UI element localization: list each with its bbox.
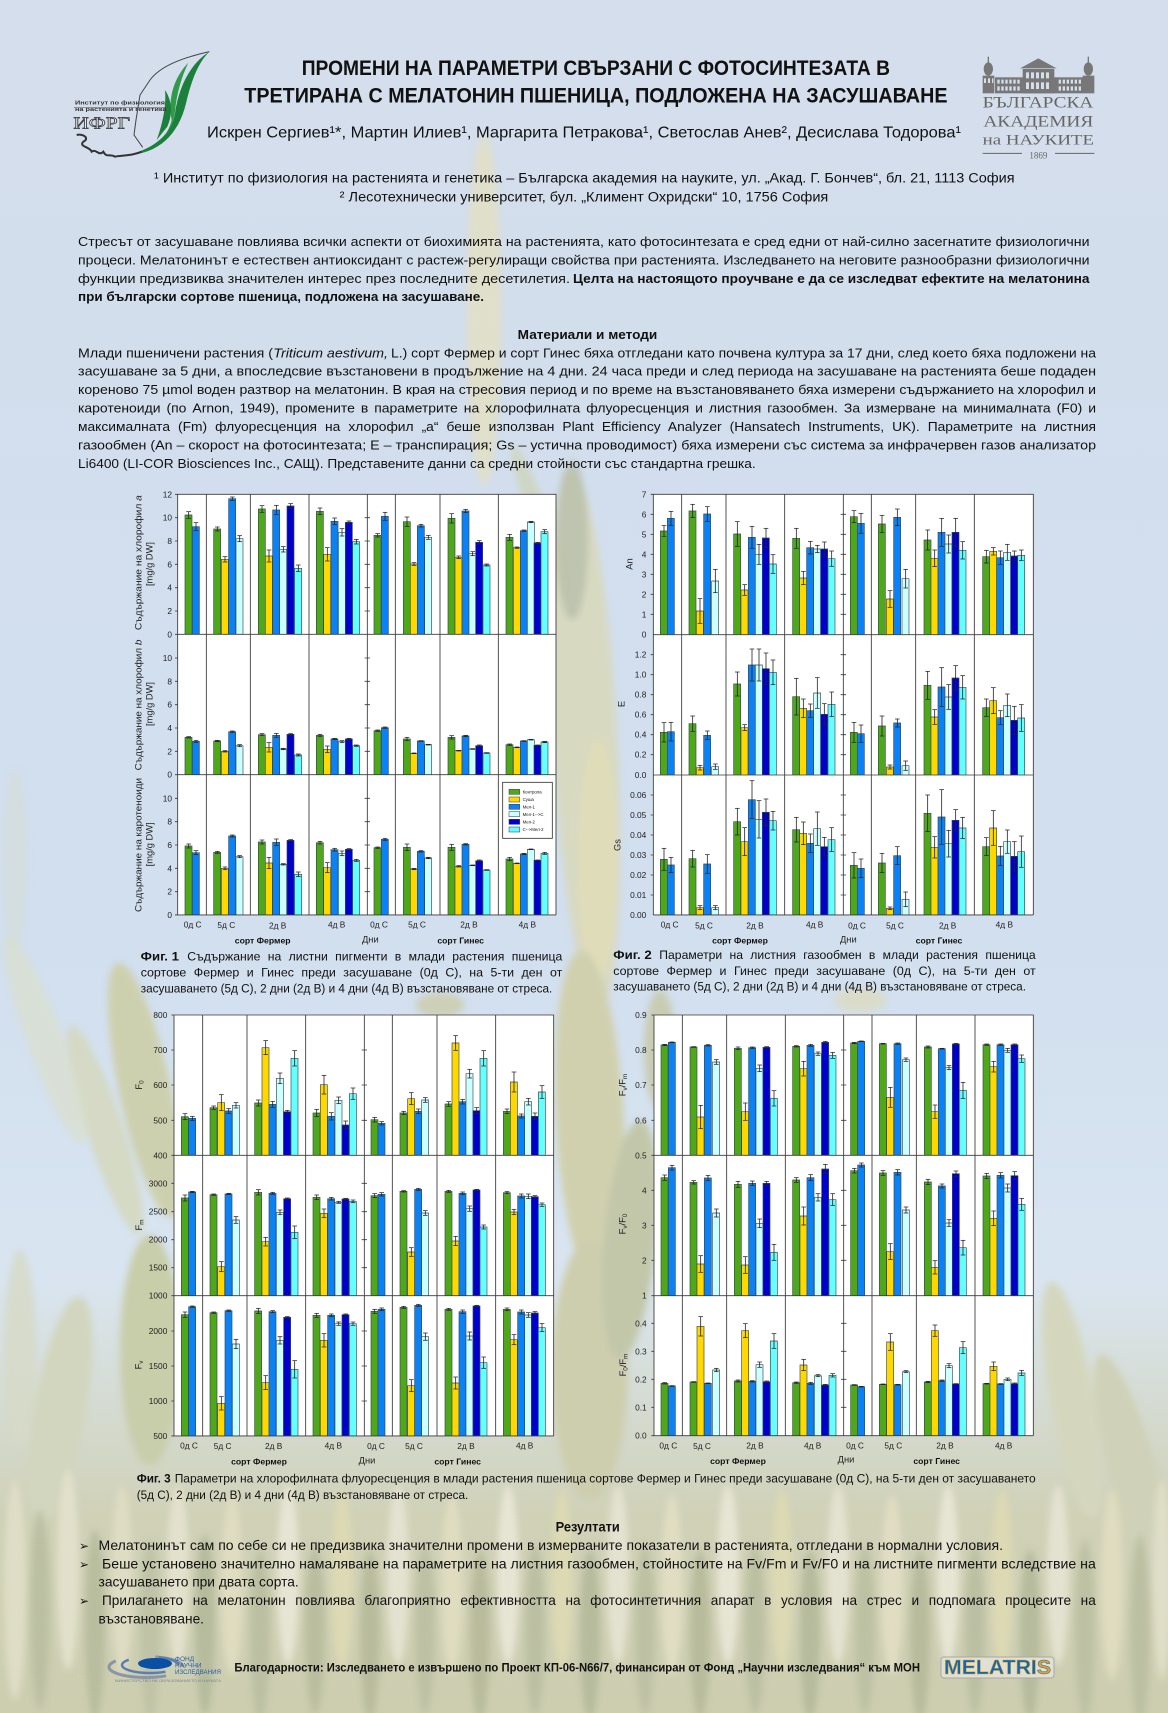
panel: F0/Fm bbox=[661, 1317, 1025, 1436]
academy name: БЪЛГАРСКА bbox=[983, 95, 1093, 112]
y-axis tick labels: 0.0 bbox=[635, 770, 647, 780]
y-axis tick labels: 1 bbox=[642, 1291, 647, 1301]
y-axis tick labels: 2000 bbox=[149, 1235, 168, 1245]
logo text: institute name: Институт по физиология bbox=[75, 99, 165, 106]
x-axis labels: сорт Фермер bbox=[710, 1456, 766, 1466]
y-axis tick labels: 7 bbox=[642, 489, 647, 499]
x-axis labels: сорт Фермер bbox=[235, 935, 291, 945]
y-axis tick labels: 10 bbox=[163, 513, 172, 523]
y-axis tick labels: 4 bbox=[167, 863, 172, 873]
y-axis titles: F bbox=[617, 1091, 627, 1096]
x-axis labels: Дни bbox=[840, 935, 857, 945]
logo: Bulgarian Academy of Sciences bbox=[983, 57, 1094, 160]
y-axis tick labels: 0.5 bbox=[635, 1150, 647, 1160]
x-axis labels: 0д С bbox=[367, 1441, 385, 1451]
caption: figure 1: сортове Фермер и Гинес преди засушаване (0д С), на 5-ти ден от bbox=[141, 966, 563, 980]
x-axis labels: сорт Гинес bbox=[434, 1456, 481, 1466]
x-axis labels: 2д В bbox=[936, 1440, 954, 1450]
x-axis labels: 5д С bbox=[214, 1441, 232, 1451]
caption: figure 1: Фиг. 1 bbox=[141, 950, 179, 964]
y-axis titles: [mg/g DW] bbox=[144, 822, 154, 866]
x-axis labels bbox=[659, 1440, 1013, 1466]
result 3: възстановяване. bbox=[98, 1610, 204, 1626]
y-axis titles: m bbox=[623, 1354, 630, 1359]
logo: national science fund: НАУЧНИ bbox=[175, 1662, 202, 1670]
methods text: Li6400 (LI-COR Biosciences Inc., САЩ). Представените данни са средни стойности със стандартна грешка. bbox=[78, 456, 756, 471]
y-axis titles bbox=[613, 558, 635, 851]
x-axis labels: 5д С bbox=[405, 1441, 423, 1451]
y-axis titles: /F bbox=[617, 1217, 627, 1225]
icon: academy building bbox=[983, 57, 1094, 93]
y-axis tick labels: 0.6 bbox=[635, 1115, 647, 1125]
result 3: ➢ bbox=[79, 1594, 89, 1608]
logo: national science fund: ИЗСЛЕДВАНИЯ bbox=[175, 1669, 221, 1676]
y-axis tick labels: 0 bbox=[167, 770, 172, 780]
y-axis tick labels: 0.4 bbox=[635, 730, 647, 740]
y-axis tick labels: 0.06 bbox=[630, 790, 647, 800]
x-axis labels: сорт Гинес bbox=[913, 1456, 960, 1466]
y-axis tick labels: 6 bbox=[167, 559, 172, 569]
academy name: на НАУКИТЕ bbox=[983, 132, 1094, 148]
y-axis tick labels: 0.8 bbox=[635, 1045, 647, 1055]
y-axis titles: 0 bbox=[139, 1080, 146, 1084]
x-axis labels: 4д В bbox=[996, 920, 1013, 930]
result 2: ➢ bbox=[79, 1557, 89, 1571]
heading: materials and methods: Материали и методи bbox=[518, 327, 657, 342]
y-axis tick labels: 8 bbox=[167, 817, 172, 827]
methods text: газообмен (An – скорост на фотосинтезата; E – транспирация; Gs – устична проводимост) бяха измерени със система за инфрачервен газов анализатор bbox=[78, 437, 1096, 452]
y-axis titles: /F bbox=[617, 1079, 627, 1087]
x-axis labels bbox=[184, 919, 536, 945]
y-axis tick labels: 0.01 bbox=[630, 890, 647, 900]
x-axis labels: 2д В bbox=[746, 920, 764, 930]
figure 3b chart: Fv/Fm, Fv/F0, F0/Fm bbox=[617, 1010, 1033, 1466]
y-axis tick labels: 1.2 bbox=[635, 650, 647, 660]
logo: national science fund: ФОНД bbox=[175, 1656, 195, 1663]
y-axis tick labels: 0.7 bbox=[635, 1080, 647, 1090]
y-axis tick labels: 1.0 bbox=[635, 670, 647, 680]
y-axis tick labels bbox=[149, 1010, 168, 1441]
y-axis tick labels: 500 bbox=[153, 1431, 168, 1441]
y-axis tick labels: 4 bbox=[642, 549, 647, 559]
legend: Мел-2 bbox=[523, 819, 536, 824]
y-axis tick labels: 400 bbox=[153, 1150, 168, 1160]
y-axis tick labels: 4 bbox=[167, 723, 172, 733]
y-axis tick labels: 0.6 bbox=[635, 710, 647, 720]
y-axis titles: E bbox=[617, 701, 627, 707]
panel: An bbox=[660, 504, 1025, 634]
authors: Искрен Сергиев¹*, Мартин Илиев¹, Маргарита Петракова¹, Светослав Анев², Десислава Тодорова¹ bbox=[207, 125, 961, 142]
y-axis tick labels: 1 bbox=[642, 609, 647, 619]
x-axis labels: 0д С bbox=[184, 919, 202, 929]
heading: results: Резултати bbox=[556, 1519, 620, 1535]
panel: chlorophyll b bbox=[185, 727, 548, 775]
caption: figure 3: (5д С), 2 дни (2д В) и 4 дни (4д В) възстановяване от стреса. bbox=[137, 1488, 468, 1502]
y-axis titles: [mg/g DW] bbox=[144, 682, 154, 726]
legend: Суша bbox=[523, 797, 534, 802]
introduction text: Стресът от засушаване повлиява всички аспекти от биохимията на растенията, като фотосинтезата е сред едни от най-силно засегнатите физиологични bbox=[78, 234, 1090, 249]
figure 1 chart: leaf pigments bbox=[133, 489, 556, 945]
y-axis tick labels: 2 bbox=[167, 887, 172, 897]
y-axis tick labels: 4 bbox=[642, 1185, 647, 1195]
y-axis tick labels: 2 bbox=[642, 589, 647, 599]
legend: Контрола bbox=[523, 789, 542, 794]
panel: Fv/Fm bbox=[661, 1041, 1025, 1155]
x-axis labels bbox=[180, 1440, 534, 1466]
result 1: Мелатонинът сам по себе си не предизвика значителни промени в измерваните показатели в растенията, отгледани в нормални условия. bbox=[98, 1537, 1003, 1553]
y-axis tick labels: 0.05 bbox=[630, 810, 647, 820]
y-axis tick labels: 800 bbox=[153, 1010, 168, 1020]
y-axis titles: Gs bbox=[613, 839, 623, 851]
x-axis labels: сорт Гинес bbox=[916, 936, 963, 946]
y-axis tick labels: 0.0 bbox=[635, 1431, 647, 1441]
methods text: каротеноиди (по Arnon, 1949), промените в параметрите на хлорофилната флуоресценция и листния газообмен. За измерване на минималната (F0) и bbox=[78, 401, 1096, 416]
y-axis titles: Съдържание на хлорофил a bbox=[133, 495, 143, 630]
logo text: institute name bbox=[73, 99, 167, 133]
y-axis titles bbox=[133, 1080, 146, 1369]
introduction text: при български сортове пшеница, подложена на засушаване. bbox=[78, 289, 484, 304]
x-axis labels: 2д В bbox=[460, 920, 478, 930]
y-axis titles: v bbox=[138, 1360, 145, 1364]
y-axis tick labels: 0.4 bbox=[635, 1318, 647, 1328]
y-axis titles: An bbox=[625, 558, 635, 570]
x-axis labels: 0д С bbox=[659, 1440, 677, 1450]
y-axis tick labels: 2 bbox=[167, 746, 172, 756]
y-axis titles: /F bbox=[618, 1359, 628, 1367]
methods text: Млади пшеничени растения ( bbox=[78, 345, 274, 360]
x-axis labels: сорт Фермер bbox=[712, 936, 768, 946]
panel: E bbox=[660, 649, 1025, 775]
y-axis tick labels: 2 bbox=[167, 606, 172, 616]
y-axis tick labels: 0.00 bbox=[630, 910, 647, 920]
x-axis labels: 4д В bbox=[325, 1440, 342, 1450]
affiliations bbox=[154, 170, 1015, 205]
x-axis labels: 5д С bbox=[693, 1441, 711, 1451]
y-axis titles: F bbox=[134, 1084, 144, 1090]
x-axis labels: 0д С bbox=[846, 1440, 864, 1450]
y-axis tick labels: 0.03 bbox=[630, 850, 647, 860]
introduction text: Целта на настоящото проучване е да се изследват ефектите на мелатонина bbox=[573, 271, 1090, 286]
logo: institute of plant physiology and genetics bbox=[73, 52, 209, 157]
x-axis labels: Дни bbox=[838, 1455, 854, 1465]
y-axis titles: m bbox=[139, 1220, 146, 1225]
y-axis tick labels: 500 bbox=[153, 1115, 168, 1125]
caption: figure 1 bbox=[141, 950, 563, 995]
y-axis tick labels bbox=[635, 1010, 647, 1441]
y-axis tick labels: 5 bbox=[642, 529, 647, 539]
y-axis titles: Съдържание на каротеноиди bbox=[133, 778, 143, 912]
figure 2 chart: leaf gas exchange bbox=[613, 489, 1033, 946]
panel: Fv/F0 bbox=[661, 1163, 1025, 1296]
y-axis tick labels: 0.3 bbox=[635, 1346, 647, 1356]
panel: Gs bbox=[660, 781, 1025, 915]
y-axis titles bbox=[133, 495, 154, 912]
panel: chlorophyll a bbox=[185, 497, 548, 634]
caption: figure 2: Параметри на листния газообмен в млади растения пшеница bbox=[659, 948, 1036, 962]
x-axis labels: 2д В bbox=[746, 1440, 764, 1450]
x-axis labels: сорт Фермер bbox=[231, 1456, 287, 1466]
y-axis titles: m bbox=[622, 1074, 629, 1079]
result 2 bbox=[79, 1555, 1096, 1590]
y-axis tick labels: 2 bbox=[642, 1255, 647, 1265]
y-axis tick labels: 8 bbox=[167, 676, 172, 686]
y-axis tick labels: 1500 bbox=[149, 1361, 168, 1371]
x-axis labels: Дни bbox=[359, 1455, 375, 1465]
y-axis titles: F bbox=[618, 1371, 628, 1376]
y-axis tick labels: 700 bbox=[153, 1045, 168, 1055]
x-axis labels: 2д В bbox=[269, 920, 287, 930]
y-axis tick labels: 0 bbox=[642, 629, 647, 639]
y-axis tick labels: 6 bbox=[642, 509, 647, 519]
y-axis tick labels: 2000 bbox=[149, 1326, 168, 1336]
x-axis labels: 4д В bbox=[516, 1440, 534, 1450]
logo text: institute name: на растенията и генетика bbox=[75, 107, 167, 113]
result 2: Беше установено значително намаляване на параметрите на листния газообмен, стойностите на Fv/Fm и Fv/F0 и на листните пигменти вследствие на bbox=[102, 1555, 1096, 1571]
title bbox=[244, 57, 948, 108]
caption: figure 2: засушаването (5д С), 2 дни (2д В) и 4 дни (4д В) възстановяване от стреса. bbox=[613, 980, 1026, 994]
panel: Fv bbox=[181, 1304, 545, 1436]
panel: F0 bbox=[181, 1036, 545, 1155]
x-axis labels: 4д В bbox=[804, 1440, 822, 1450]
caption: figure 1: Съдържание на листни пигменти в млади растения пшеница bbox=[187, 950, 562, 964]
y-axis titles: F bbox=[617, 1229, 627, 1234]
logo: national science fund: МИНИСТЕРСТВО НА ОБРАЗОВАНИЕТО И НАУКАТА bbox=[115, 1678, 221, 1683]
y-axis tick labels: 3000 bbox=[149, 1178, 168, 1188]
introduction text: процеси. Мелатонинът е естествен антиоксидант с растеж-регулиращи свойства при растенията. Изследването на неговите разнообразни физиологични bbox=[78, 252, 1090, 267]
methods text: Triticum aestivum, bbox=[273, 345, 388, 360]
result 3: Прилагането на мелатонин повлиява благоприятно ефективността на фотосинтетичния апарат в условия на стрес и подпомага процесите на bbox=[102, 1592, 1096, 1608]
caption: figure 2: сортове Фермер и Гинес преди засушаване (0д С), на 5-ти ден от bbox=[613, 964, 1036, 978]
methods text bbox=[78, 345, 1097, 471]
y-axis tick labels: 0 bbox=[167, 910, 172, 920]
y-axis tick labels: 0.02 bbox=[630, 870, 647, 880]
y-axis tick labels: 10 bbox=[163, 653, 172, 663]
title: ТРЕТИРАНА С МЕЛАТОНИН ПШЕНИЦА, ПОДЛОЖЕНА НА ЗАСУШАВАНЕ bbox=[244, 85, 948, 108]
x-axis labels: 2д В bbox=[457, 1441, 475, 1451]
y-axis tick labels: 3 bbox=[642, 569, 647, 579]
x-axis labels: 2д В bbox=[939, 920, 957, 930]
y-axis tick labels: 1000 bbox=[149, 1396, 168, 1406]
caption: figure 1: засушаването (5д С), 2 дни (2д В) и 4 дни (4д В) възстановяване от стреса. bbox=[141, 981, 552, 995]
academy name: АКАДЕМИЯ bbox=[983, 114, 1093, 131]
legend: С-->Мел-2 bbox=[523, 827, 544, 832]
y-axis tick labels: 1500 bbox=[149, 1263, 168, 1273]
introduction text: функции предизвиква значителен интерес през последните десетилетия. bbox=[78, 271, 570, 286]
y-axis titles: F bbox=[134, 1225, 144, 1230]
caption: figure 3 bbox=[137, 1472, 1036, 1502]
x-axis labels: 5д С bbox=[217, 920, 235, 930]
x-axis labels: 5д С bbox=[884, 1440, 902, 1450]
methods text: L.) сорт Фермер и сорт Гинес бяха отгледани като почвена култура за 17 дни, след което бяха подложени на bbox=[391, 345, 1097, 360]
y-axis tick labels: 0.2 bbox=[635, 1374, 647, 1384]
methods text: кореново 75 µmol воден разтвор на мелатонин. В края на стресовия период и по време на възстановяването бяха измерени съдържанието на хлорофил и bbox=[78, 382, 1096, 397]
y-axis tick labels: 12 bbox=[163, 489, 172, 499]
panel: Fm bbox=[181, 1188, 545, 1296]
affiliations: ² Лесотехнически университет, бул. „Климент Охридски“ 10, 1756 София bbox=[340, 189, 828, 205]
y-axis titles: v bbox=[622, 1087, 629, 1091]
affiliations: ¹ Институт по физиология на растенията и генетика – Българска академия на науките, ул. „Акад. Г. Бончев“, бл. 21, 1113 София bbox=[154, 170, 1015, 186]
caption: figure 2 bbox=[613, 948, 1036, 994]
x-axis labels: 0д С bbox=[848, 920, 866, 930]
methods text: максималната (Fm) флуоресценция на хлорофил „a“ беше използван Plant Efficiency Analyzer (Hansatech Instruments, UK). Параметрите на листния bbox=[78, 419, 1096, 434]
x-axis labels: 5д С bbox=[695, 920, 713, 930]
academy name bbox=[983, 95, 1094, 160]
y-axis tick labels: 0.1 bbox=[635, 1402, 647, 1412]
logo: national science fund bbox=[109, 1656, 221, 1683]
legend bbox=[503, 782, 552, 838]
y-axis tick labels bbox=[630, 489, 647, 920]
y-axis titles bbox=[617, 1074, 630, 1376]
x-axis labels: Дни bbox=[362, 934, 379, 944]
caption: figure 3: Фиг. 3 bbox=[137, 1472, 171, 1486]
introduction text bbox=[78, 234, 1090, 304]
acknowledgements: Благодарности: Изследването е извършено по Проект КП-06-N66/7, финансиран от Фонд „Научни изследвания“ към МОН bbox=[234, 1661, 920, 1675]
y-axis tick labels bbox=[163, 489, 172, 920]
y-axis titles: F bbox=[133, 1364, 143, 1369]
y-axis tick labels: 0.2 bbox=[635, 750, 647, 760]
y-axis titles: 0 bbox=[623, 1367, 630, 1371]
y-axis tick labels: 4 bbox=[167, 583, 172, 593]
y-axis tick labels: 0 bbox=[167, 629, 172, 639]
y-axis tick labels: 600 bbox=[153, 1080, 168, 1090]
academy name: 1869 bbox=[1029, 150, 1048, 160]
x-axis labels: сорт Гинес bbox=[437, 935, 484, 945]
results list bbox=[79, 1537, 1096, 1626]
logo text: institute name: ИФРГ bbox=[73, 114, 130, 133]
x-axis labels: 0д С bbox=[180, 1440, 198, 1450]
x-axis labels: 0д С bbox=[370, 919, 388, 929]
y-axis tick labels: 1000 bbox=[149, 1291, 168, 1301]
y-axis tick labels: 3 bbox=[642, 1220, 647, 1230]
y-axis tick labels: 2500 bbox=[149, 1207, 168, 1217]
legend: Мел-1-->С bbox=[523, 812, 543, 817]
caption: figure 2: Фиг. 2 bbox=[613, 948, 652, 962]
y-axis titles: [mg/g DW] bbox=[144, 542, 154, 586]
caption: figure 3: Параметри на хлорофилната флуоресценция в млади растения пшеница сортове Фермер и Гинес преди засушаване (0д С), на 5-ти ден от засушаването bbox=[175, 1472, 1036, 1486]
y-axis tick labels: 0.9 bbox=[635, 1010, 647, 1020]
legend: Мел-1 bbox=[523, 804, 536, 809]
result 1: ➢ bbox=[79, 1539, 89, 1553]
x-axis labels: 5д С bbox=[886, 920, 904, 930]
result 3 bbox=[79, 1592, 1096, 1626]
y-axis titles: 0 bbox=[622, 1213, 629, 1217]
methods text: засушаване за 5 дни, а впоследсвие възстановени в продължение на 4 дни. 24 часа преди и след периода на засушаване на растенията беше подаден bbox=[78, 364, 1096, 379]
y-axis tick labels: 10 bbox=[163, 793, 172, 803]
x-axis labels: 4д В bbox=[806, 920, 824, 930]
logo: MelaTris: MELATRI S bbox=[944, 1657, 1051, 1679]
y-axis tick labels: 6 bbox=[167, 840, 172, 850]
result 2: засушаването при двата сорта. bbox=[98, 1574, 299, 1590]
y-axis tick labels: 0.04 bbox=[630, 830, 647, 840]
x-axis labels: 5д С bbox=[408, 919, 426, 929]
title: ПРОМЕНИ НА ПАРАМЕТРИ СВЪРЗАНИ С ФОТОСИНТЕЗАТА В bbox=[302, 57, 890, 80]
panel: carotenoids bbox=[185, 835, 548, 915]
y-axis titles: Съдържание на хлорофил b bbox=[133, 640, 143, 770]
y-axis tick labels: 0.8 bbox=[635, 690, 647, 700]
x-axis labels bbox=[661, 920, 1013, 946]
y-axis tick labels: 8 bbox=[167, 536, 172, 546]
y-axis tick labels: 6 bbox=[167, 700, 172, 710]
x-axis labels: 2д В bbox=[265, 1441, 283, 1451]
x-axis labels: 4д В bbox=[328, 920, 346, 930]
x-axis labels: 0д С bbox=[661, 920, 679, 930]
x-axis labels: 4д В bbox=[519, 919, 536, 929]
y-axis titles: v bbox=[622, 1225, 629, 1229]
figure 3a chart: F0, Fm, Fv bbox=[133, 1010, 554, 1466]
x-axis labels: 4д В bbox=[995, 1440, 1013, 1450]
